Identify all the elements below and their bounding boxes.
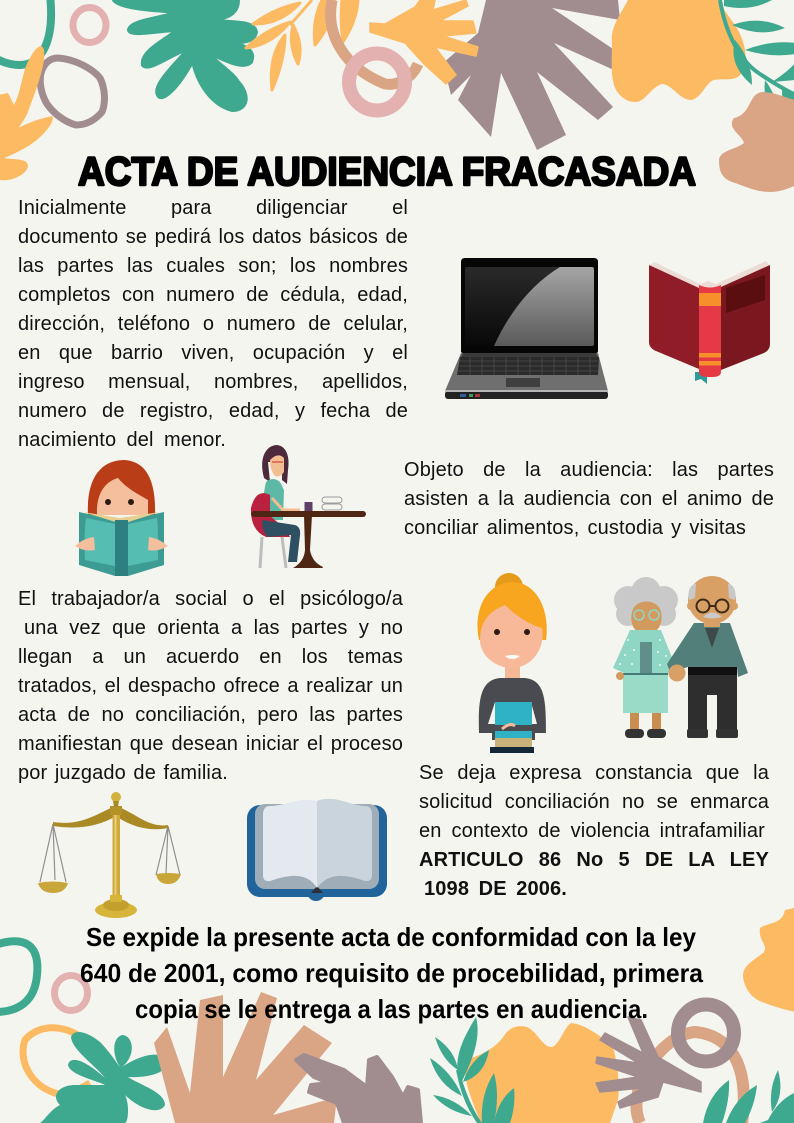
text block: expresa constancia bbox=[419, 762, 769, 900]
text block: expresa constancia: en contexto de violencia intrafamiliar bbox=[419, 820, 765, 842]
text block: objeto de la audiencia: Objeto de la audiencia: las partes bbox=[404, 459, 774, 481]
text block: datos básicos: completos con numero de cédula, edad, bbox=[18, 284, 408, 306]
text block: datos básicos: documento se pedirá los datos básicos de bbox=[18, 226, 408, 248]
illustration: laptop bbox=[445, 258, 608, 399]
illustration: child reading a book bbox=[75, 460, 168, 576]
text block: datos básicos: nacimiento del menor. bbox=[18, 429, 226, 451]
text block: datos básicos: numero de registro, edad, y fecha de bbox=[18, 400, 408, 422]
closing statement bbox=[80, 922, 704, 1024]
text block: datos básicos: las partes las cuales son; los nombres bbox=[18, 255, 408, 277]
illustration: elderly couple bbox=[613, 576, 748, 738]
text block: datos básicos: en que barrio viven, ocupación y el bbox=[18, 342, 408, 364]
text block: expresa constancia: Se deja expresa constancia que la bbox=[419, 762, 769, 784]
text block: objeto de la audiencia: asisten a la audiencia con el animo de bbox=[404, 488, 774, 510]
text block: trabajador social: tratados, el despacho ofrece a realizar un bbox=[18, 675, 403, 697]
text block: trabajador social: acta de no conciliación, pero las partes bbox=[18, 704, 403, 726]
illustration: red book bbox=[649, 261, 770, 384]
text block: datos básicos: ingreso mensual, nombres, apellidos, bbox=[18, 371, 408, 393]
text block: datos básicos bbox=[18, 197, 408, 451]
decoration: bottom foliage bbox=[0, 908, 794, 1123]
closing statement: Se expide la presente acta de conformidad con la ley bbox=[86, 922, 697, 952]
decoration: top foliage bbox=[0, 0, 794, 192]
text block: trabajador social: llegan a un acuerdo en los temas bbox=[18, 646, 403, 668]
text block: trabajador social: una vez que orienta a las partes y no bbox=[24, 617, 403, 639]
text block: datos básicos: dirección, teléfono o numero de celular, bbox=[18, 313, 408, 335]
text block: trabajador social: manifiestan que desean iniciar el proceso bbox=[18, 733, 403, 755]
illustration: woman at a table bbox=[251, 445, 363, 568]
illustration: open blue book bbox=[247, 799, 387, 901]
illustration: balance scale bbox=[38, 792, 181, 918]
closing statement: copia se le entrega a las partes en audiencia. bbox=[135, 994, 648, 1024]
text block: expresa constancia: solicitud conciliación no se enmarca bbox=[419, 791, 769, 813]
illustration: blonde woman holding a book bbox=[477, 573, 547, 753]
text block: expresa constancia: 1098 DE 2006. bbox=[424, 878, 567, 900]
text block: trabajador social bbox=[18, 588, 403, 784]
text block: expresa constancia: ARTICULO 86 No 5 DE LA LEY bbox=[419, 849, 769, 871]
text block: objeto de la audiencia: conciliar alimentos, custodia y visitas bbox=[404, 517, 746, 539]
text block: datos básicos: Inicialmente para diligenciar el bbox=[18, 197, 408, 219]
text block: trabajador social: El trabajador/a social o el psicólogo/a bbox=[18, 588, 403, 610]
text block: objeto de la audiencia bbox=[404, 459, 774, 539]
title: ACTA DE AUDIENCIA FRACASADA bbox=[78, 150, 696, 194]
text block: trabajador social: por juzgado de familia. bbox=[18, 762, 228, 784]
closing statement: 640 de 2001, como requisito de procebilidad, primera bbox=[80, 958, 704, 988]
